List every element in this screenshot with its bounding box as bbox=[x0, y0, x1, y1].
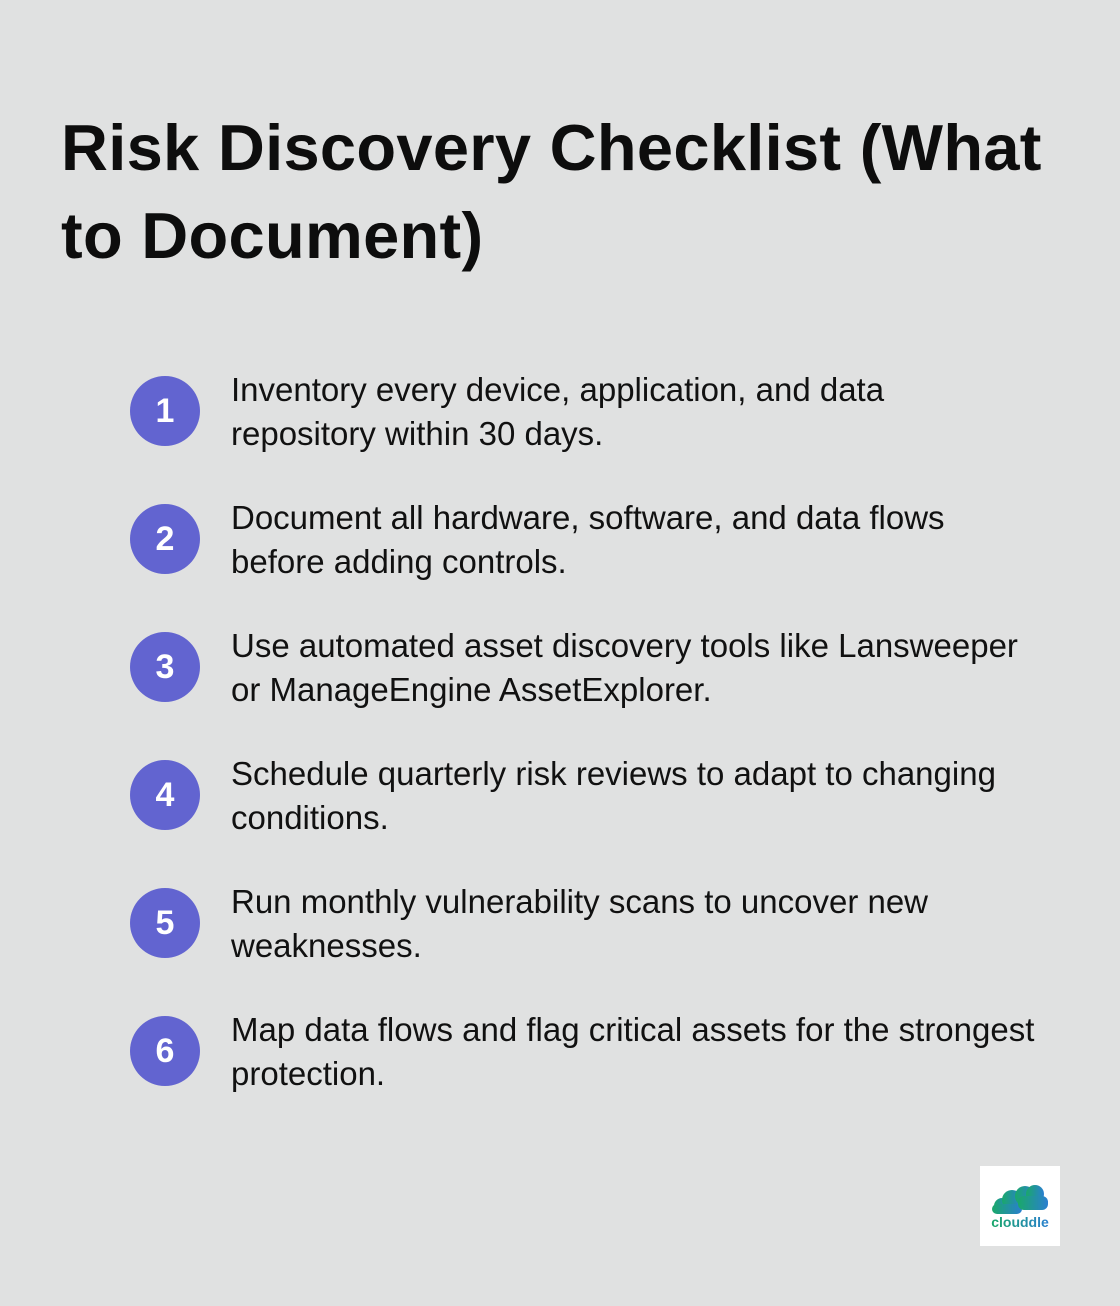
text 4 bbox=[231, 755, 996, 836]
title: to Document) bbox=[61, 199, 483, 272]
logo text: clouddle bbox=[991, 1214, 1049, 1230]
text 3: or ManageEngine AssetExplorer. bbox=[231, 671, 712, 708]
text 2: Document all hardware, software, and data flows bbox=[231, 499, 945, 536]
badge 2: 2 bbox=[156, 520, 174, 558]
text 6 bbox=[231, 1011, 1034, 1092]
item 4 bbox=[130, 755, 996, 836]
text 3 bbox=[231, 627, 1018, 708]
badge 1 bbox=[130, 376, 200, 446]
title bbox=[61, 111, 1042, 272]
badge 2 bbox=[130, 504, 200, 574]
badge 3: 3 bbox=[156, 648, 174, 686]
item 1 bbox=[130, 371, 884, 452]
text 1: repository within 30 days. bbox=[231, 415, 603, 452]
item 6 bbox=[130, 1011, 1034, 1092]
text 4: conditions. bbox=[231, 799, 389, 836]
badge 5: 5 bbox=[156, 904, 174, 942]
text 2: before adding controls. bbox=[231, 543, 567, 580]
badge 4 bbox=[130, 760, 200, 830]
logo: clouddle bbox=[980, 1166, 1060, 1246]
text 1: Inventory every device, application, and data bbox=[231, 371, 884, 408]
text 4: Schedule quarterly risk reviews to adapt to changing bbox=[231, 755, 996, 792]
item 2 bbox=[130, 499, 945, 580]
text 6: protection. bbox=[231, 1055, 385, 1092]
item 5 bbox=[130, 883, 928, 964]
badge 1: 1 bbox=[156, 392, 174, 430]
text 5: Run monthly vulnerability scans to uncover new bbox=[231, 883, 928, 920]
badge 6 bbox=[130, 1016, 200, 1086]
text 3: Use automated asset discovery tools like Lansweeper bbox=[231, 627, 1018, 664]
title: Risk Discovery Checklist (What bbox=[61, 111, 1042, 184]
text 5 bbox=[231, 883, 928, 964]
text 1 bbox=[231, 371, 884, 452]
icon: clouds bbox=[992, 1185, 1048, 1214]
text 6: Map data flows and flag critical assets for the strongest bbox=[231, 1011, 1034, 1048]
badge 6: 6 bbox=[156, 1032, 174, 1070]
text 2 bbox=[231, 499, 945, 580]
badge 4: 4 bbox=[156, 776, 174, 814]
item 3 bbox=[130, 627, 1018, 708]
badge 3 bbox=[130, 632, 200, 702]
badge 5 bbox=[130, 888, 200, 958]
text 5: weaknesses. bbox=[231, 927, 422, 964]
